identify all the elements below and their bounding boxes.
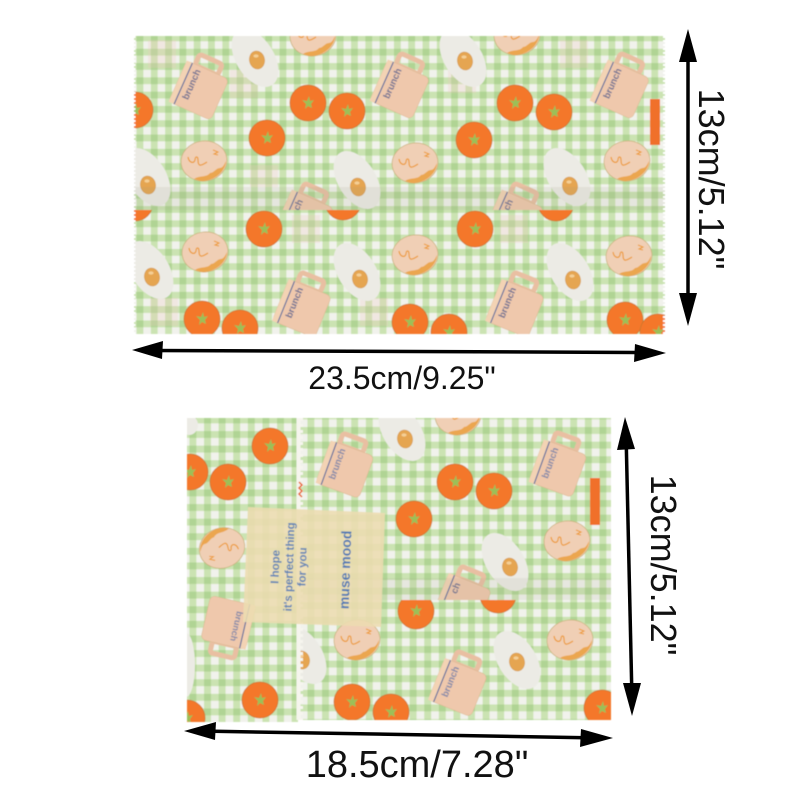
eggs xyxy=(134,36,590,210)
fold shadow xyxy=(134,187,665,210)
mug: brunch xyxy=(540,446,561,480)
note text: muse mood: muse mood xyxy=(336,530,354,609)
orange xyxy=(186,453,209,491)
arrow: width of large sheet xyxy=(132,341,666,362)
folded mug: ch xyxy=(291,198,306,212)
pinked edges xyxy=(134,36,665,334)
panel: large wrap sheet xyxy=(133,35,666,335)
upside-down mug xyxy=(198,595,256,660)
arrow: width of small sheet xyxy=(184,722,613,747)
label: small sheet width: 18.5cm/7.28" xyxy=(306,744,528,786)
folded mug xyxy=(492,181,543,210)
oranges xyxy=(133,210,666,335)
mug xyxy=(272,270,331,334)
arrow: height of small sheet xyxy=(617,417,641,716)
mug: brunch xyxy=(181,68,204,102)
bottom half illustrations xyxy=(133,210,666,335)
orange xyxy=(210,464,246,500)
folded mug xyxy=(438,564,490,601)
buns xyxy=(180,35,651,184)
eggs xyxy=(378,418,529,592)
note text: it's perfect thing: it's perfect thing xyxy=(282,522,298,612)
orange xyxy=(186,699,206,723)
upside-down mug: brunch xyxy=(228,610,245,642)
oranges xyxy=(117,85,572,158)
label: large sheet height: 13cm/5.12" xyxy=(691,89,732,269)
mug: brunch xyxy=(327,447,348,481)
note text: I hope: I hope xyxy=(269,550,283,584)
right main panel xyxy=(296,417,612,721)
mug xyxy=(485,270,544,334)
eggs xyxy=(300,631,540,690)
orange tab xyxy=(650,99,660,145)
label: large sheet width: 23.5cm/9.25" xyxy=(308,360,496,396)
mug: brunch xyxy=(497,286,519,320)
red tab scrap xyxy=(299,482,302,497)
translucent note card xyxy=(243,507,385,627)
mug xyxy=(370,52,429,118)
bun xyxy=(198,526,246,569)
mug: brunch xyxy=(382,67,405,101)
folded mug: ch xyxy=(501,198,516,212)
buns xyxy=(434,418,591,562)
mug xyxy=(428,648,492,717)
oranges xyxy=(396,464,512,537)
mug: brunch xyxy=(602,67,625,101)
orange xyxy=(252,428,288,464)
mug xyxy=(529,429,591,497)
orange xyxy=(242,682,278,718)
pinked edge xyxy=(298,418,300,720)
mug xyxy=(316,430,378,498)
fold shadow xyxy=(299,578,611,600)
mug xyxy=(590,51,649,118)
oranges xyxy=(333,599,612,721)
panel: small wrap sheet xyxy=(186,417,612,723)
left flap xyxy=(186,417,298,723)
folded mug: ch xyxy=(449,581,463,595)
mug: brunch xyxy=(284,286,306,320)
folded mug xyxy=(282,182,332,210)
buns xyxy=(331,617,596,663)
label: small sheet height: 13cm/5.12" xyxy=(643,475,684,655)
top half illustrations xyxy=(114,12,654,249)
mug xyxy=(168,52,228,120)
mug: brunch xyxy=(440,665,462,699)
note text: for you: for you xyxy=(296,547,310,587)
arrow: height of large sheet xyxy=(679,29,697,326)
buns xyxy=(179,229,655,279)
orange tab xyxy=(590,478,600,525)
eggs xyxy=(134,240,594,302)
